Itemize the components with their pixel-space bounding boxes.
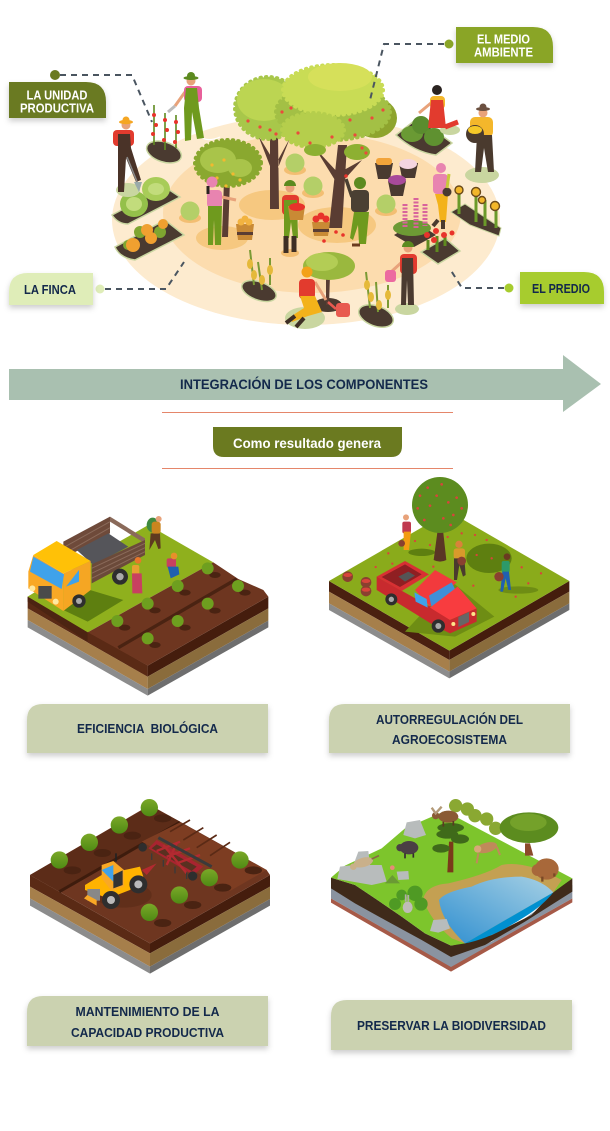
isometric block: red pickup and apple tree bbox=[329, 477, 569, 678]
icon: big apple tree bbox=[246, 63, 397, 228]
icon: yellow tractor bbox=[84, 853, 147, 909]
icon: apple tree bbox=[412, 477, 468, 562]
connector: la finca bbox=[96, 262, 184, 294]
label: el predio: EL PREDIO bbox=[532, 282, 590, 296]
caption: autorregulación del agroecosistema: AUTORREGULACIÓN DEL bbox=[376, 712, 523, 727]
icon: fallen apples bbox=[374, 532, 542, 598]
icon: apple baskets bbox=[342, 571, 371, 596]
person: man with basket bbox=[465, 104, 499, 183]
icon: soil shade bbox=[95, 882, 152, 908]
icon: fruit tree bbox=[195, 140, 261, 237]
person: man picking apple bbox=[346, 177, 369, 245]
icon: red pickup bbox=[377, 561, 477, 633]
person: woman with potted plant bbox=[433, 163, 452, 229]
person: kneeling gardener bbox=[285, 266, 342, 329]
caption: mantenimiento de la capacidad productiva bbox=[27, 996, 268, 1046]
caption: preservar la biodiversidad: PRESERVAR LA BIODIVERSIDAD bbox=[357, 1019, 546, 1033]
icon: rows of seedlings bbox=[111, 562, 251, 648]
label: el medio ambiente: AMBIENTE bbox=[474, 46, 533, 60]
label: el medio ambiente bbox=[456, 27, 553, 63]
person: woman with apple basket bbox=[281, 180, 305, 257]
arrow: integración de los componentes bbox=[9, 355, 601, 412]
person: woman picking fruit bbox=[206, 176, 236, 245]
farm illustration bbox=[112, 63, 501, 332]
connector: la unidad productiva bbox=[50, 70, 152, 122]
icon: shrubs and rabbit bbox=[385, 865, 428, 913]
icon: red watering can bbox=[328, 302, 350, 317]
icon: pumpkin plot bbox=[115, 219, 184, 260]
icon: row trees bbox=[51, 799, 262, 927]
icon: apple tree left bbox=[235, 77, 301, 209]
icon: yellow truck bbox=[28, 517, 145, 611]
arrow: integración de los componentes: INTEGRACIÓN DE LOS COMPONENTES bbox=[180, 375, 428, 392]
label: la unidad productiva: PRODUCTIVA bbox=[20, 102, 94, 116]
connector: el medio ambiente bbox=[370, 40, 454, 100]
caption: preservar la biodiversidad bbox=[331, 1000, 572, 1050]
person: woman in red bbox=[419, 85, 460, 135]
caption: mantenimiento de la capacidad productiva: MANTENIMIENTO DE LA bbox=[76, 1005, 220, 1019]
animal: lynx bbox=[474, 840, 500, 863]
isometric block: truck on field bbox=[28, 516, 268, 696]
icon: red flower plot bbox=[421, 228, 460, 264]
animal: raccoon bbox=[350, 855, 379, 870]
caption: eficiencia biológica bbox=[27, 704, 268, 753]
icon: apple pickers bbox=[398, 514, 511, 592]
animal: bear bbox=[532, 858, 559, 882]
icon: tomato plot bbox=[144, 105, 184, 167]
icon: melon plot bbox=[396, 116, 452, 155]
icon: rocks bbox=[337, 820, 450, 933]
button: como resultado genera: Como resultado genera bbox=[233, 435, 381, 451]
icon: corn plots bbox=[239, 250, 396, 332]
icon: cabbage plot bbox=[112, 177, 180, 224]
isometric block: tractor on tilled soil bbox=[30, 799, 270, 974]
connector: el predio bbox=[450, 269, 514, 292]
caption: eficiencia biológica: EFICIENCIA BIOLÓGICA bbox=[77, 721, 218, 736]
animal: moose bbox=[432, 807, 458, 827]
person: watering man bbox=[168, 72, 220, 141]
label: la finca bbox=[9, 273, 93, 305]
icon: forest and acacia bbox=[449, 799, 558, 856]
label: la unidad productiva bbox=[9, 82, 106, 118]
label: la finca: LA FINCA bbox=[24, 283, 76, 297]
label: el predio bbox=[520, 272, 604, 304]
person: man with watering can bbox=[385, 241, 419, 315]
icon: lake bbox=[423, 864, 562, 943]
icon: shrubs bbox=[179, 154, 397, 223]
icon: red cultivator bbox=[138, 838, 212, 881]
icon: foxglove plot bbox=[393, 198, 436, 247]
caption: mantenimiento de la capacidad productiva: CAPACIDAD PRODUCTIVA bbox=[71, 1026, 224, 1040]
caption: autorregulación del agroecosistema bbox=[329, 704, 570, 753]
caption: autorregulación del agroecosistema: AGROECOSISTEMA bbox=[392, 733, 507, 747]
person: shovel man bbox=[113, 116, 142, 197]
icon: harvest barrels and pots bbox=[236, 158, 418, 243]
animal: boar bbox=[396, 841, 418, 858]
label: el medio ambiente: EL MEDIO bbox=[477, 32, 530, 46]
ground ellipses bbox=[112, 115, 500, 325]
icon: savanna tree bbox=[432, 823, 469, 872]
icon: small tree bbox=[303, 252, 355, 312]
icon: farm workers bbox=[132, 516, 179, 593]
button: como resultado genera bbox=[213, 427, 402, 457]
label: la unidad productiva: LA UNIDAD bbox=[26, 88, 88, 102]
isometric block: biodiversity landscape bbox=[331, 799, 572, 972]
icon: sunflower plot bbox=[451, 186, 501, 236]
